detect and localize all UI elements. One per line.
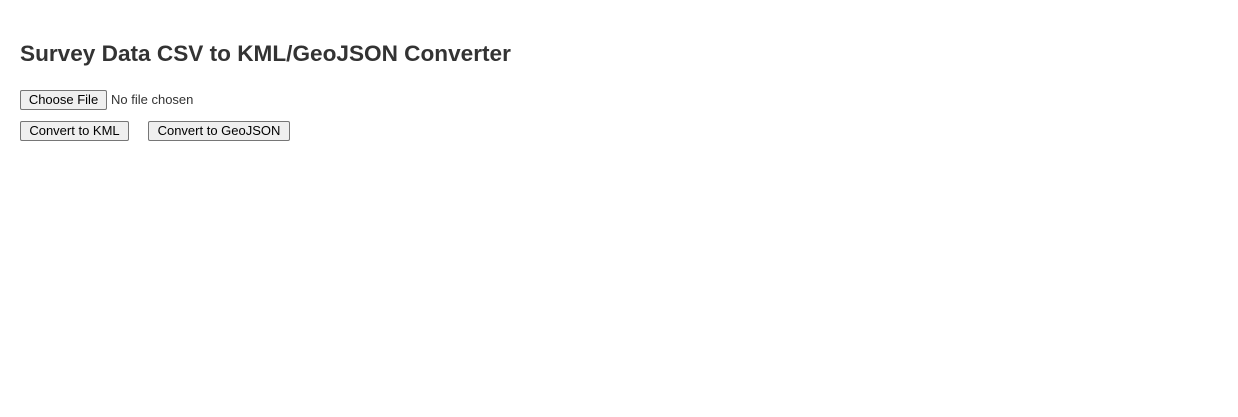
choose file button: Choose File [29, 92, 98, 107]
convert to KML button: Convert to KML [29, 123, 120, 138]
convert to KML button [20, 121, 129, 141]
no file chosen text: No file chosen [111, 92, 193, 107]
convert to GeoJSON button: Convert to GeoJSON [158, 123, 280, 138]
title: Survey Data CSV to KML/GeoJSON Converter [20, 41, 511, 66]
convert to GeoJSON button [148, 121, 290, 141]
choose file button [20, 90, 107, 110]
file input [20, 90, 193, 110]
